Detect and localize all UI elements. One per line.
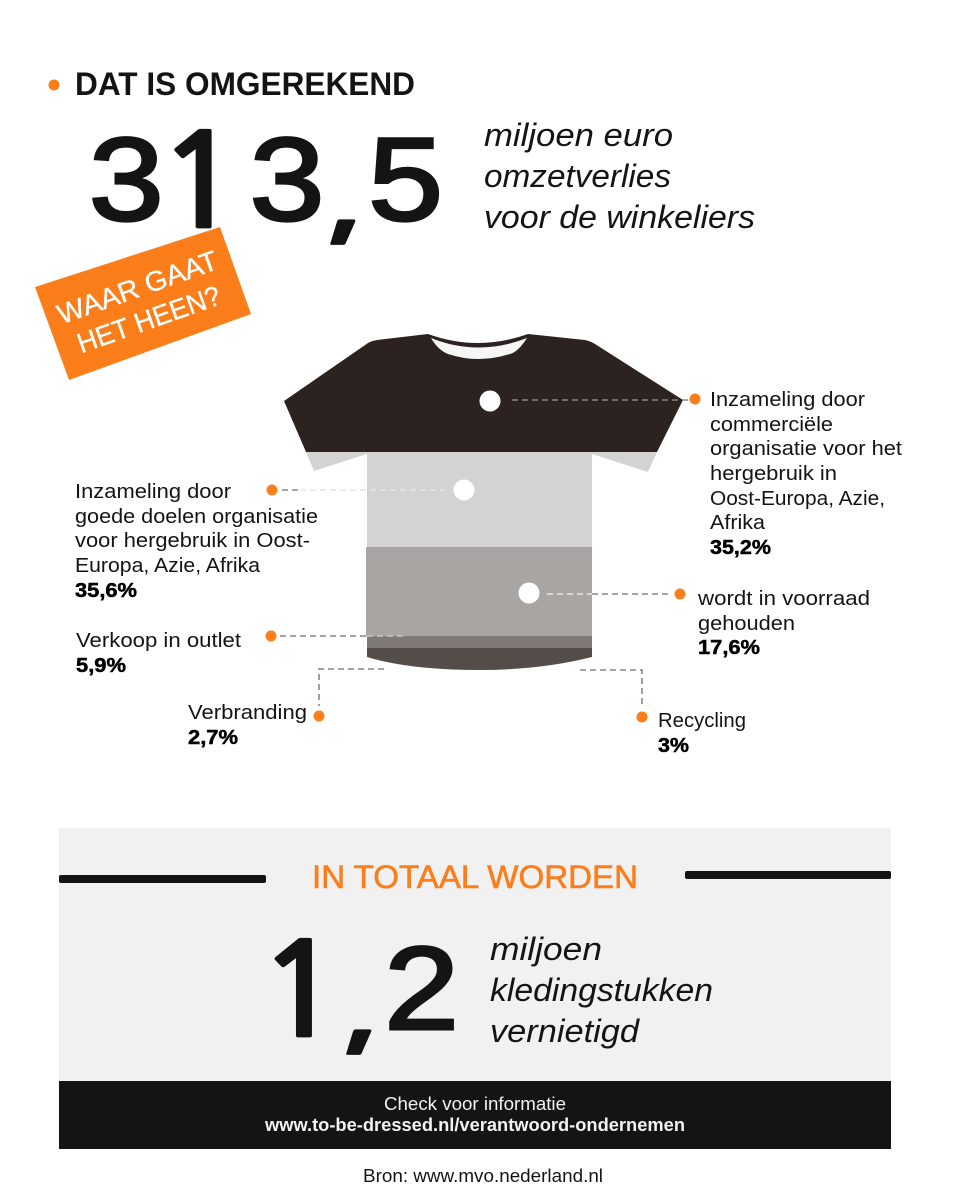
big number: revenue loss: 3 xyxy=(89,113,164,245)
label: outlet: Verkoop in outlet xyxy=(76,630,241,652)
label: charity collection: voor hergebruik in Oost- xyxy=(75,530,310,552)
label: commercial collection: 35,2% xyxy=(710,537,771,559)
marker: recycling xyxy=(580,670,648,722)
label: charity collection xyxy=(75,481,318,602)
revenue loss description xyxy=(484,117,755,235)
panel: total xyxy=(59,828,891,1081)
garments description xyxy=(490,931,713,1049)
label: charity collection: Inzameling door xyxy=(75,481,231,503)
label: stock: wordt in voorraad xyxy=(697,588,870,610)
revenue loss description: voor de winkeliers xyxy=(484,199,755,235)
big number: revenue loss: 5 xyxy=(368,113,443,245)
label: charity collection: goede doelen organisatie xyxy=(75,506,318,528)
label: stock xyxy=(697,588,870,659)
label: recycling: Recycling xyxy=(658,710,746,732)
label: incineration xyxy=(188,702,307,749)
big number: garments destroyed: 1 xyxy=(255,927,346,1057)
label: recycling: 3% xyxy=(658,735,689,757)
panel heading: IN TOTAAL WORDEN xyxy=(312,859,638,895)
garments description: vernietigd xyxy=(490,1013,640,1049)
big number: garments destroyed: , xyxy=(339,937,380,1057)
big number: garments destroyed: 2 xyxy=(384,922,459,1054)
footer bar xyxy=(59,1081,891,1149)
label: commercial collection xyxy=(710,389,902,559)
heading: DAT IS OMGEREKEND xyxy=(75,66,415,102)
label: commercial collection: organisatie voor het xyxy=(710,438,902,460)
marker: incineration xyxy=(314,669,384,722)
label: charity collection: Europa, Azie, Afrika xyxy=(75,555,261,577)
label: incineration: 2,7% xyxy=(188,727,238,749)
rotated tag: HET HEEN? xyxy=(73,280,225,359)
marker: stock band xyxy=(518,582,686,604)
label: recycling xyxy=(658,710,746,757)
label: commercial collection: Oost-Europa, Azie, xyxy=(710,488,885,510)
footer bar: Check voor informatie xyxy=(384,1094,566,1114)
label: stock: 17,6% xyxy=(698,637,760,659)
marker: charity band xyxy=(266,480,474,500)
heading bullet xyxy=(48,80,60,90)
footer bar: www.to-be-dressed.nl/verantwoord-ondernemen xyxy=(264,1115,685,1135)
garments description: miljoen xyxy=(490,931,602,967)
marker: outlet xyxy=(266,630,405,642)
label: commercial collection: commerciële xyxy=(710,414,833,436)
garments description: kledingstukken xyxy=(490,972,713,1008)
label: stock: gehouden xyxy=(698,613,795,635)
marker: top band xyxy=(480,390,700,412)
t-shirt xyxy=(284,334,683,670)
source: Bron: www.mvo.nederland.nl xyxy=(363,1166,603,1186)
label: commercial collection: hergebruik in xyxy=(710,463,837,485)
big number: revenue loss: 3 xyxy=(250,113,324,245)
label: outlet: 5,9% xyxy=(76,655,126,677)
label: commercial collection: Inzameling door xyxy=(710,389,865,411)
label: outlet xyxy=(76,630,241,677)
label: incineration: Verbranding xyxy=(188,702,307,724)
rotated tag xyxy=(35,227,251,380)
big number: revenue loss: 1 xyxy=(155,118,246,248)
rotated tag: WAAR GAAT xyxy=(53,245,222,330)
label: charity collection: 35,6% xyxy=(75,580,137,602)
revenue loss description: miljoen euro xyxy=(484,117,673,153)
big number: revenue loss: , xyxy=(323,127,364,247)
revenue loss description: omzetverlies xyxy=(484,158,671,194)
label: commercial collection: Afrika xyxy=(710,512,766,534)
